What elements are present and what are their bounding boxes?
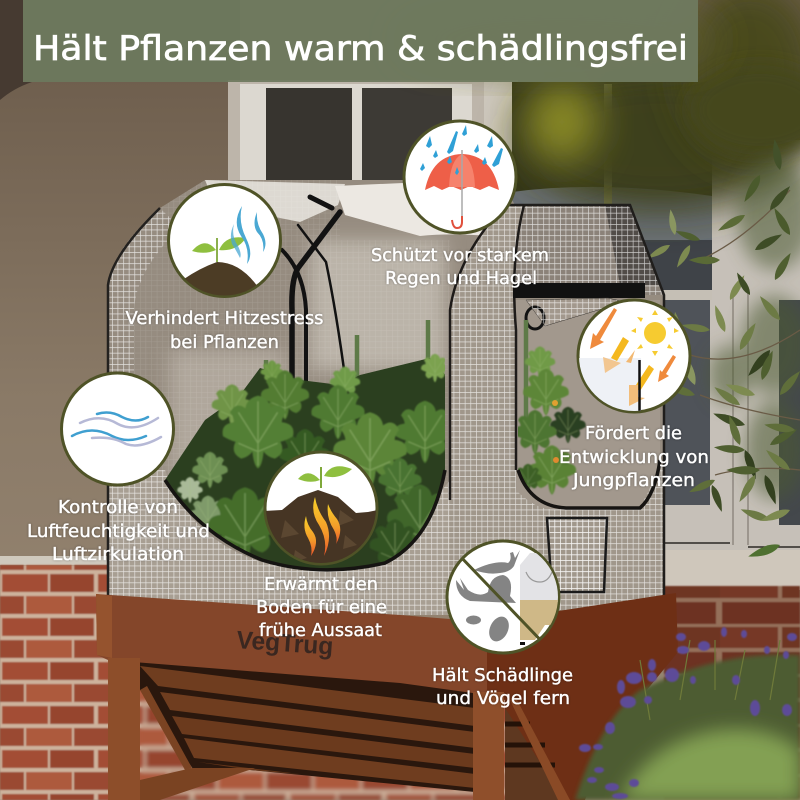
label: warms the soil: frühe Aussaat xyxy=(259,621,382,641)
label: heat stress: bei Pflanzen xyxy=(170,333,279,353)
panel: humidity and air circulation xyxy=(27,373,210,565)
label: young plants: Jungpflanzen xyxy=(572,471,695,491)
side pocket xyxy=(547,518,607,592)
left window xyxy=(240,84,472,184)
label: warms the soil: Boden für eine xyxy=(256,598,387,618)
right plant xyxy=(513,346,586,495)
icon: warm soil with flames xyxy=(264,452,378,570)
left brick wall xyxy=(0,556,520,800)
label: keeps pests away: und Vögel fern xyxy=(436,689,570,709)
greenhouse cover xyxy=(108,180,664,615)
label: warms the soil: Erwärmt den xyxy=(264,575,378,595)
title: Hält Pflanzen warm & schädlingsfrei xyxy=(33,29,688,68)
label: heat stress: Verhindert Hitzestress xyxy=(126,309,324,329)
black hoop and straps xyxy=(281,194,645,381)
label: rain protection: Schützt vor starkem xyxy=(371,246,549,266)
legs xyxy=(108,658,140,800)
icon: umbrella in rain xyxy=(404,121,516,233)
label: warms the soil xyxy=(256,575,387,641)
bamboo stakes xyxy=(264,320,528,418)
front rail xyxy=(96,594,487,695)
label: keeps pests away: Hält Schädlinge xyxy=(432,666,573,686)
panel: rain protection xyxy=(371,121,549,289)
rolled white roof xyxy=(205,180,345,222)
label: humidity and air circulation xyxy=(27,498,210,565)
panel: keeps pests away xyxy=(432,541,573,709)
pale curtain xyxy=(170,350,285,480)
door panel interior xyxy=(516,300,660,510)
right brick wall xyxy=(664,586,800,800)
brace xyxy=(510,700,570,800)
panel: heat stress xyxy=(126,184,324,353)
label: humidity and air circulation: Luftfeuchtigkeit und xyxy=(27,522,210,542)
olive branches right xyxy=(646,139,800,561)
foliage blur top right xyxy=(400,0,800,210)
lavender xyxy=(575,627,800,800)
label: young plants: Entwicklung von xyxy=(559,448,709,468)
cucumber plants xyxy=(165,354,455,575)
frame edges xyxy=(108,208,160,600)
label: young plants: Fördert die xyxy=(585,424,682,444)
translucent back and left panels xyxy=(109,180,663,562)
label: keeps pests away xyxy=(432,666,573,709)
fine mesh overlay xyxy=(134,180,450,560)
top-left roof and gutter xyxy=(0,0,32,100)
icon: sun rays through mesh xyxy=(578,300,690,413)
VegTrug logo: VegTrug xyxy=(236,626,334,661)
icon: crossed out pests and bird xyxy=(447,541,562,653)
right-face slats xyxy=(505,708,558,800)
label: humidity and air circulation: Kontrolle von xyxy=(58,498,178,518)
dense foliage shade xyxy=(708,160,800,500)
right window dark glass xyxy=(484,82,712,300)
slats xyxy=(140,666,475,788)
label: rain protection: Regen und Hagel xyxy=(385,269,537,289)
label: rain protection xyxy=(371,246,549,289)
right upper panel xyxy=(515,205,664,295)
centre mesh strip xyxy=(450,206,522,574)
title bar xyxy=(23,0,698,82)
left mesh strip xyxy=(109,210,171,373)
label: heat stress xyxy=(126,309,324,353)
panel: young plants xyxy=(559,300,709,491)
panel: warms the soil xyxy=(256,452,387,641)
right rail xyxy=(487,593,678,800)
slat backing xyxy=(140,655,475,792)
wooden planter xyxy=(96,593,678,800)
icon: seedling with steam xyxy=(168,184,280,300)
rolled door panel xyxy=(526,298,625,326)
bottom mesh band xyxy=(108,470,450,615)
label: humidity and air circulation: Luftzirkulation xyxy=(52,545,184,565)
window wall xyxy=(228,82,484,180)
arched door zips xyxy=(165,460,660,570)
icon: air waves xyxy=(62,373,174,485)
lower right mesh xyxy=(516,460,664,610)
label: young plants xyxy=(559,424,709,491)
white door panels right xyxy=(660,140,800,590)
